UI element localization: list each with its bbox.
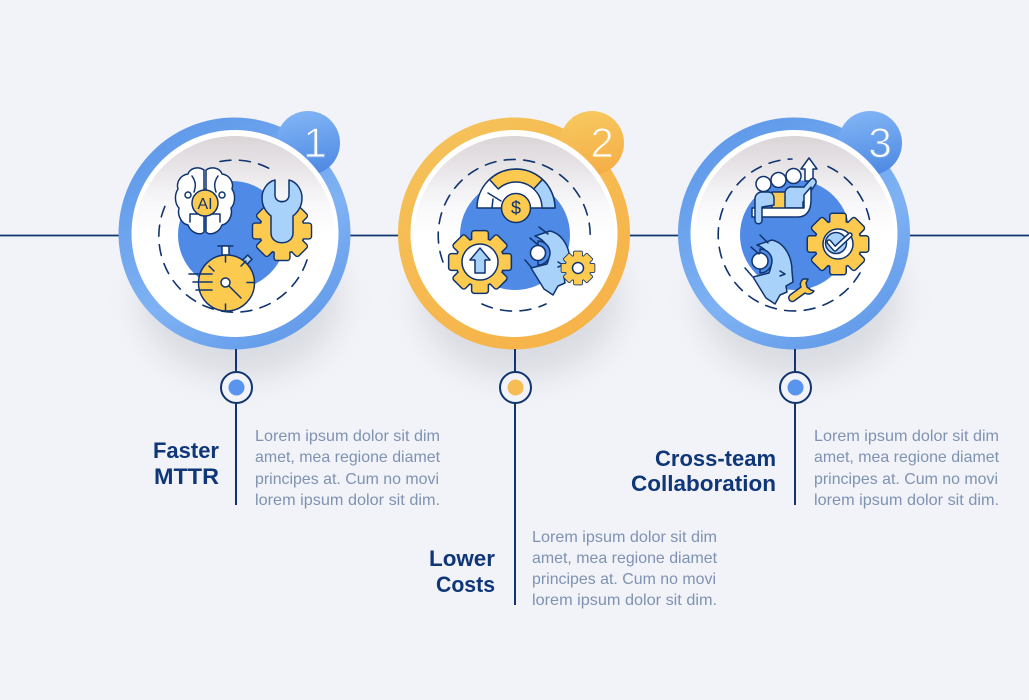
badge number 3: 3 [868, 119, 892, 166]
text block 1: amet, mea regione diamet [255, 449, 441, 466]
heading: Cross-team Collaboration [631, 446, 776, 496]
connector 1 with node [221, 349, 252, 505]
heading: Cross-team Collaboration: Cross-team [655, 446, 776, 471]
text block 2: Lorem ipsum dolor sit dim [532, 529, 717, 546]
dashed ring 3 [718, 159, 870, 311]
connector 2 with node [500, 349, 531, 605]
icon: cost gauge: $ [511, 198, 521, 218]
text block 1: lorem ipsum dolor sit dim. [255, 492, 440, 509]
heading: Cross-team Collaboration: Collaboration [631, 471, 776, 496]
icon: AI head with wrench [745, 235, 814, 304]
connector 3 with node [780, 349, 811, 505]
icon: AI brain: AI [197, 196, 213, 213]
panel: step 3 circle [678, 111, 910, 378]
dashed ring 2 [438, 159, 590, 311]
text block 1: Lorem ipsum dolor sit dim [255, 428, 440, 445]
icon: team with rising arrow [752, 158, 817, 224]
text block 3: lorem ipsum dolor sit dim. [814, 492, 999, 509]
text block 3: Lorem ipsum dolor sit dim [814, 428, 999, 445]
heading: Lower Costs: Lower [429, 546, 495, 571]
text block 3 [814, 428, 1000, 509]
dashed ring 1 [159, 160, 307, 312]
blue backdrop 3 [740, 180, 850, 290]
heading: Lower Costs [429, 546, 495, 597]
badge number 2: 2 [590, 119, 614, 166]
timeline horizontal line [0, 234, 1029, 236]
heading: Lower Costs: Costs [436, 572, 495, 597]
text block 2 [532, 529, 718, 609]
icon: cost gauge [477, 169, 555, 222]
heading: Faster MTTR: Faster [153, 438, 219, 463]
heading: Faster MTTR: MTTR [154, 464, 219, 489]
panel: step 1 circle [118, 111, 350, 378]
icon: AI head with gear [525, 227, 594, 295]
icon: stopwatch [189, 246, 254, 311]
text block 1: principes at. Cum no movi [255, 471, 439, 488]
icon: wrench and gear [253, 180, 311, 260]
blue backdrop 2 [460, 180, 570, 290]
text block 3: amet, mea regione diamet [814, 449, 1000, 466]
badge number 1: 1 [303, 119, 327, 166]
text block 2: amet, mea regione diamet [532, 550, 718, 567]
blue backdrop 1 [178, 181, 286, 289]
icon: gear with check [808, 214, 868, 274]
text block 1 [255, 428, 441, 509]
panel: step 2 circle [398, 111, 630, 378]
text block 3: principes at. Cum no movi [814, 471, 998, 488]
icon: gear with up arrow [449, 231, 511, 293]
text block 2: lorem ipsum dolor sit dim. [532, 592, 717, 609]
icon: AI brain [175, 168, 235, 234]
heading: Faster MTTR [153, 438, 219, 489]
text block 2: principes at. Cum no movi [532, 571, 716, 588]
